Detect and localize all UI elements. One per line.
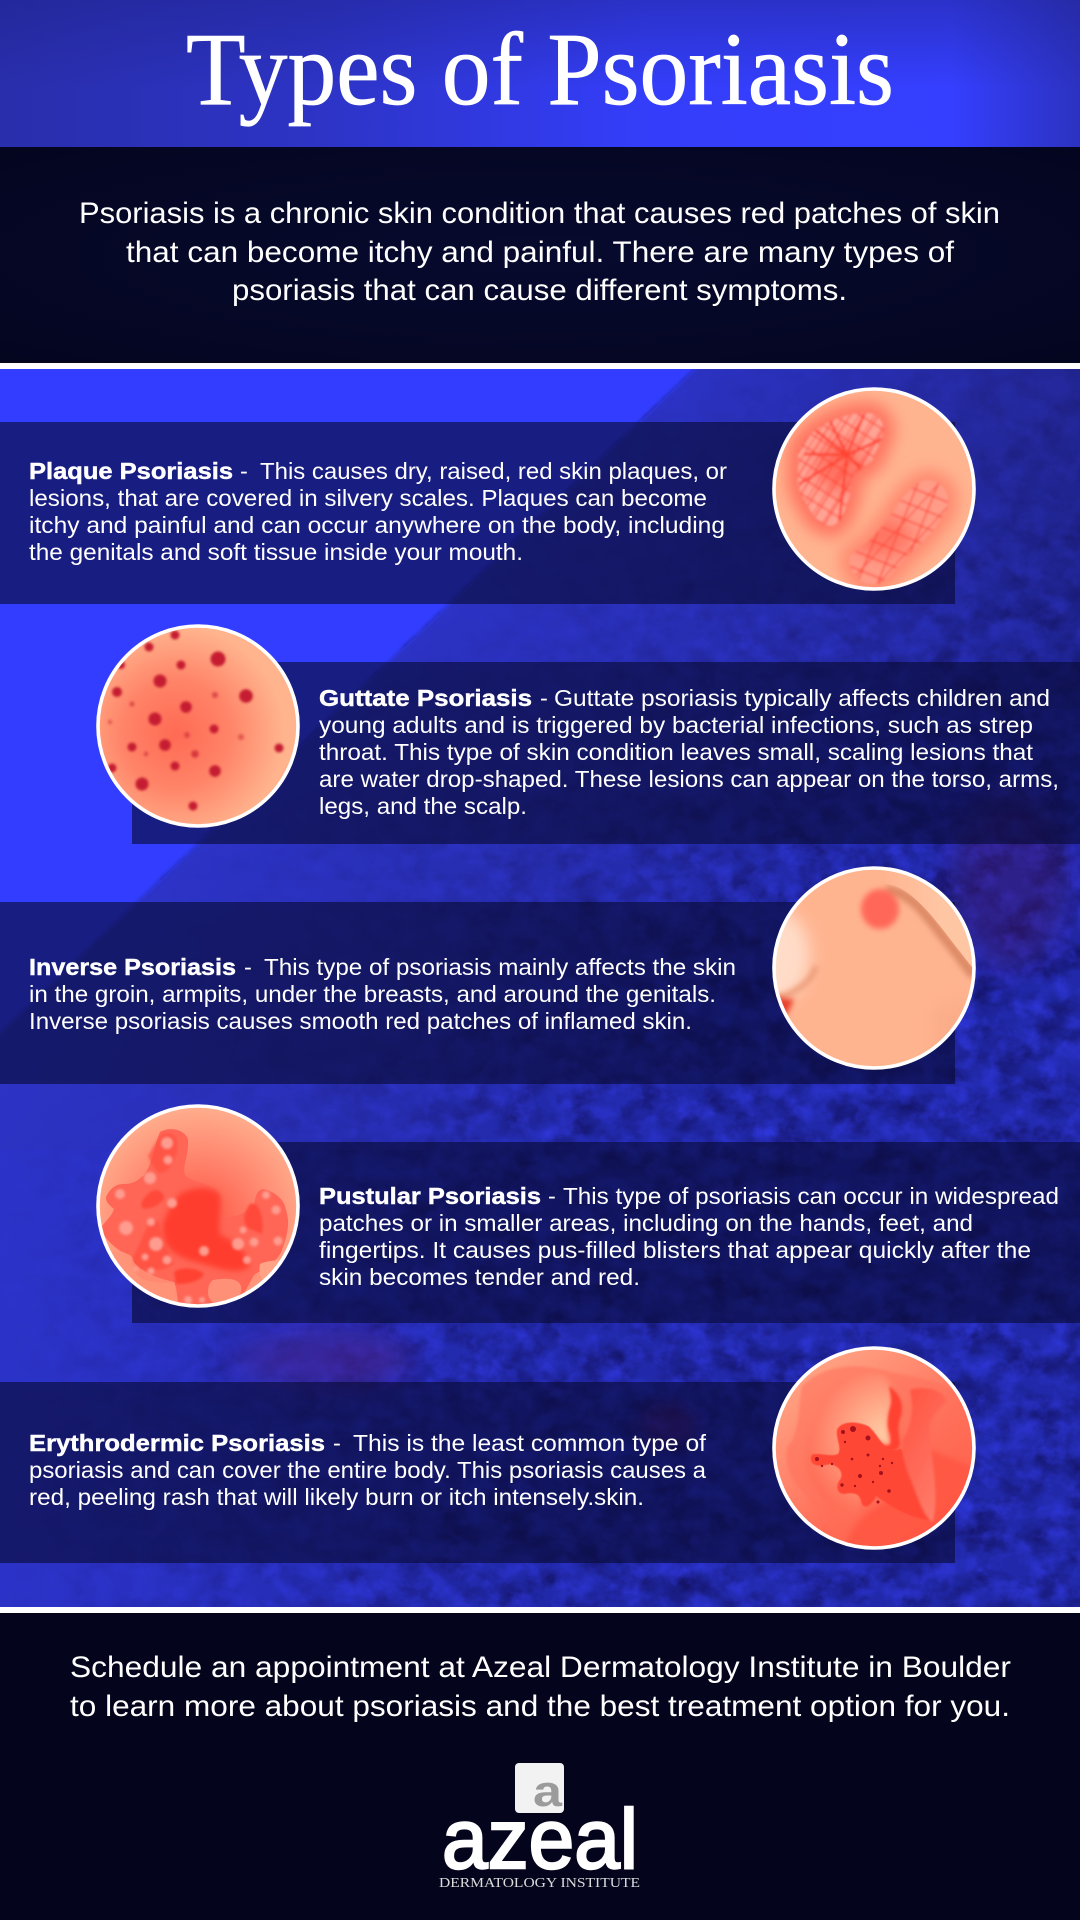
panel: erythrodermic psoriasis — [0, 1382, 955, 1563]
panel: pustular psoriasis: - — [548, 1183, 556, 1209]
panel: erythrodermic psoriasis: red, peeling rash that will likely burn or itch intensely.skin. — [29, 1484, 644, 1510]
panel: erythrodermic psoriasis: - — [333, 1430, 341, 1456]
panel: guttate psoriasis — [132, 662, 1080, 844]
panel: inverse psoriasis: Inverse Psoriasis — [29, 954, 236, 980]
textured main background — [0, 340, 1080, 1607]
panel: pustular psoriasis: skin becomes tender and red. — [319, 1264, 640, 1290]
panel: inverse psoriasis — [0, 902, 955, 1084]
panel: guttate psoriasis: Guttate Psoriasis — [319, 685, 532, 711]
intro panel — [0, 147, 1080, 363]
footer panel: to learn more about psoriasis and the best treatment option for you. — [70, 1690, 1010, 1723]
panel: guttate psoriasis: throat. This type of skin condition leaves small, scaling lesions that — [319, 739, 1033, 765]
header band — [0, 0, 1080, 147]
panel: pustular psoriasis: patches or in smaller areas, including on the hands, feet, and — [319, 1210, 973, 1236]
panel: erythrodermic psoriasis: psoriasis and can cover the entire body. This psoriasis causes a — [29, 1457, 707, 1483]
icon: plaque psoriasis skin — [774, 389, 974, 589]
panel: plaque psoriasis: the genitals and soft tissue inside your mouth. — [29, 539, 523, 565]
intro panel: Psoriasis is a chronic skin condition that causes red patches of skin — [79, 197, 1000, 230]
intro panel: that can become itchy and painful. There are many types of — [126, 236, 955, 269]
panel: pustular psoriasis: This type of psoriasis can occur in widespread — [563, 1183, 1059, 1209]
panel: inverse psoriasis: in the groin, armpits, under the breasts, and around the genitals. — [29, 981, 716, 1007]
panel: plaque psoriasis: - — [240, 458, 248, 484]
logo: azeal dermatology institute: a — [533, 1767, 563, 1816]
panel: plaque psoriasis: lesions, that are covered in silvery scales. Plaques can become — [29, 485, 707, 511]
panel: inverse psoriasis: Inverse psoriasis causes smooth red patches of inflamed skin. — [29, 1008, 692, 1034]
panel: pustular psoriasis: fingertips. It causes pus-filled blisters that appear quickly after the — [319, 1237, 1031, 1263]
panel: guttate psoriasis: are water drop-shaped. These lesions can appear on the torso, arms, — [319, 766, 1059, 792]
panel: guttate psoriasis: - — [540, 685, 548, 711]
panel: guttate psoriasis: Guttate psoriasis typically affects children and — [554, 685, 1050, 711]
title: Types of Psoriasis — [186, 12, 894, 127]
panel: plaque psoriasis — [0, 422, 955, 604]
icon: erythrodermic psoriasis skin — [774, 1348, 978, 1548]
panel: inverse psoriasis: - — [244, 954, 252, 980]
logo: azeal dermatology institute: azeal — [442, 1792, 638, 1886]
icon: guttate psoriasis skin — [98, 626, 298, 826]
icon: inverse psoriasis skin — [772, 866, 976, 1070]
panel: erythrodermic psoriasis: Erythrodermic Psoriasis — [29, 1430, 325, 1456]
panel: inverse psoriasis: This type of psoriasis mainly affects the skin — [264, 954, 736, 980]
intro panel: psoriasis that can cause different symptoms. — [232, 274, 847, 307]
panel: pustular psoriasis: Pustular Psoriasis — [319, 1183, 541, 1209]
footer panel: Schedule an appointment at Azeal Dermatology Institute in Boulder — [70, 1651, 1011, 1684]
logo: azeal dermatology institute: DERMATOLOGY INSTITUTE — [439, 1876, 640, 1891]
panel: guttate psoriasis: legs, and the scalp. — [319, 793, 527, 819]
panel: erythrodermic psoriasis: This is the least common type of — [353, 1430, 706, 1456]
icon: pustular psoriasis skin — [98, 1106, 298, 1310]
footer panel — [0, 1613, 1080, 1920]
panel: plaque psoriasis: This causes dry, raised, red skin plaques, or — [260, 458, 727, 484]
panel: guttate psoriasis: young adults and is triggered by bacterial infections, such as strep — [319, 712, 1033, 738]
panel: plaque psoriasis: Plaque Psoriasis — [29, 458, 233, 484]
panel: pustular psoriasis — [132, 1142, 1080, 1323]
panel: plaque psoriasis: itchy and painful and can occur anywhere on the body, including — [29, 512, 725, 538]
